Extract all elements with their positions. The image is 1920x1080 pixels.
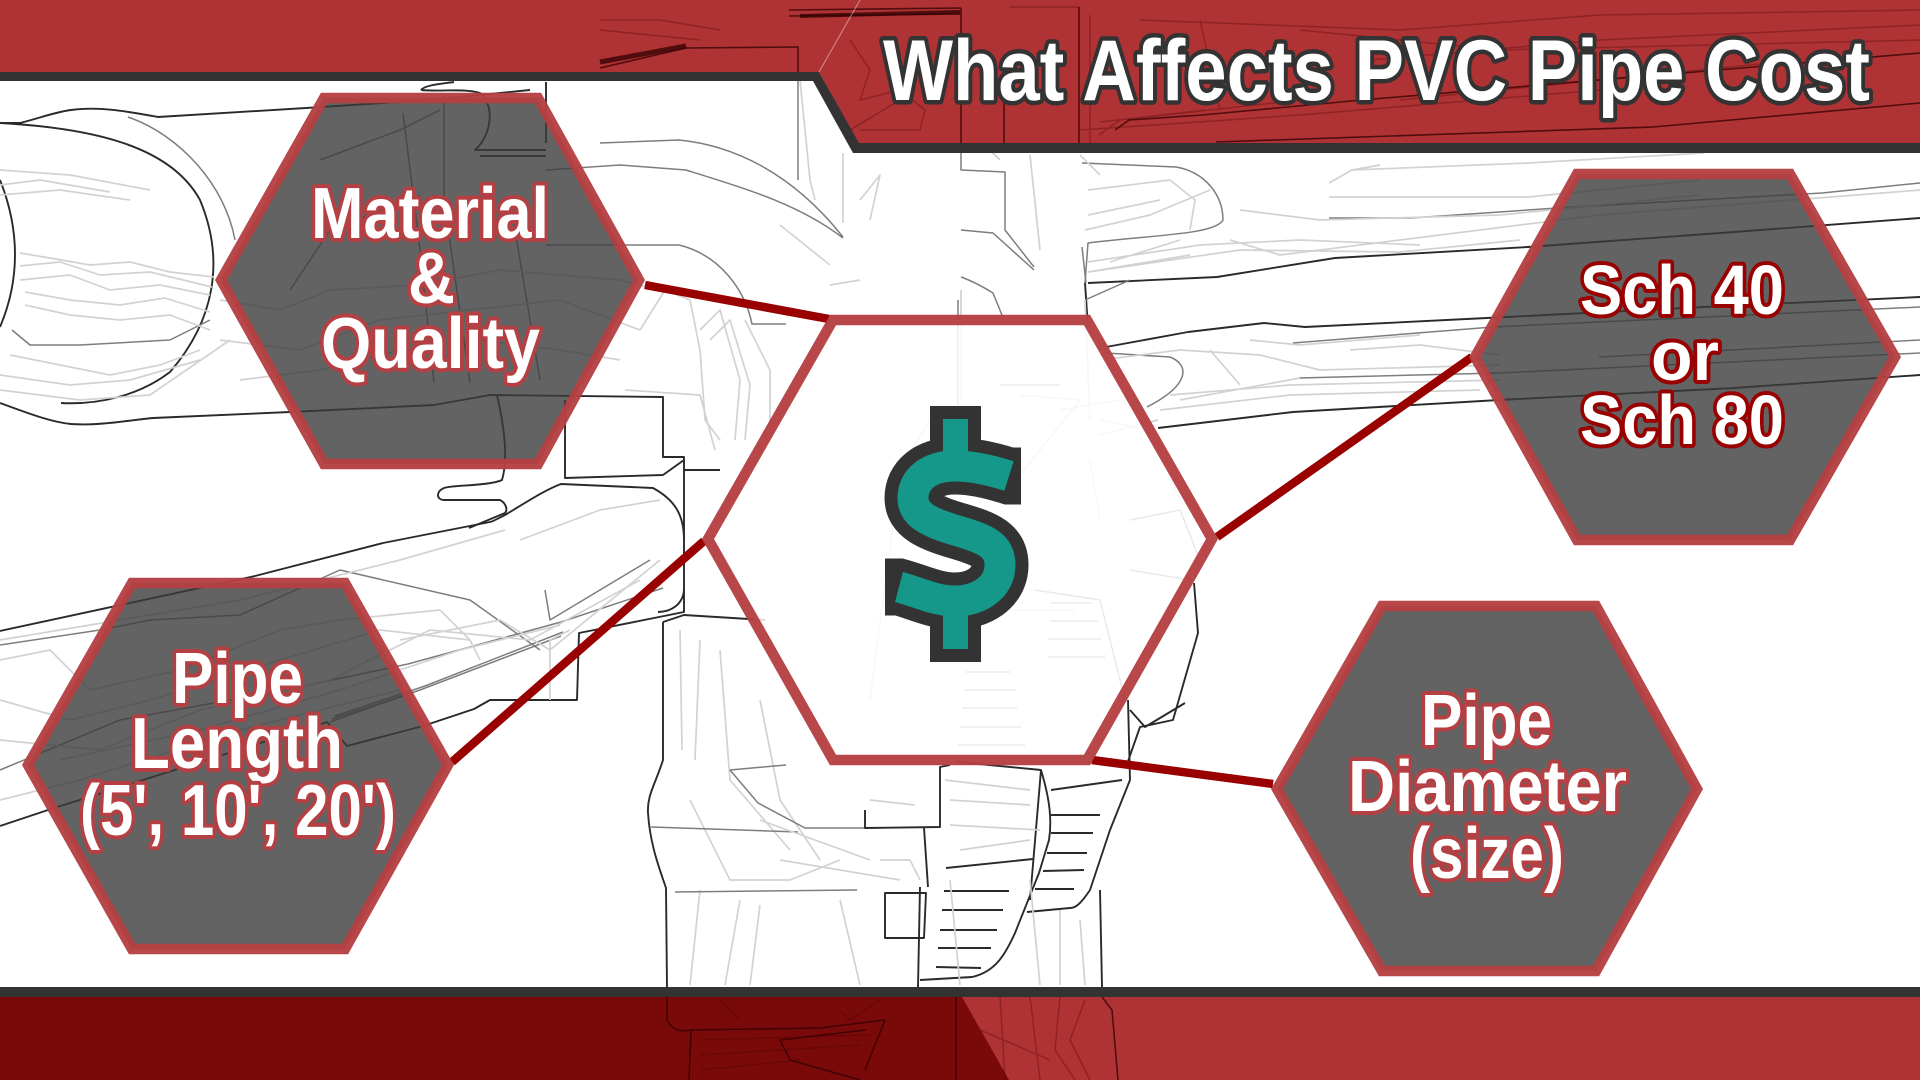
label: pipe diameter: (size) bbox=[1410, 814, 1564, 894]
icon: dollar sign bbox=[885, 406, 1021, 662]
label: pipe length bbox=[80, 639, 396, 851]
bottom band texture lines bbox=[667, 997, 1118, 1080]
bottom border bbox=[0, 987, 1920, 997]
label: pipe diameter: Pipe bbox=[1421, 681, 1552, 761]
banner texture lines bbox=[600, 0, 1920, 143]
label: pipe length: Length bbox=[131, 704, 343, 784]
top red banner bbox=[0, 0, 1920, 144]
label: pipe length: (5', 10', 20') bbox=[80, 771, 396, 851]
label: material and quality: Quality bbox=[321, 304, 540, 384]
banner border bbox=[0, 72, 1920, 153]
label: schedule 40 or 80 bbox=[1580, 251, 1784, 459]
label: pipe diameter bbox=[1348, 681, 1627, 894]
bottom red band bbox=[0, 997, 1920, 1080]
panel: pipe diameter bbox=[1277, 606, 1697, 971]
connector: pipe length to center bbox=[452, 541, 704, 762]
label: pipe length: Pipe bbox=[172, 639, 303, 719]
label: material and quality: Material bbox=[311, 174, 549, 254]
bottom dark red wedge bbox=[0, 997, 1009, 1080]
connector: material to center bbox=[645, 285, 829, 319]
label: schedule 40 or 80: or bbox=[1651, 317, 1719, 395]
panel: schedule bbox=[1475, 174, 1895, 540]
central hexagon with dollar icon bbox=[708, 320, 1212, 760]
label: material and quality bbox=[311, 174, 549, 384]
connector: schedule to center bbox=[1217, 357, 1472, 537]
panel: material and quality bbox=[221, 98, 639, 464]
label: pipe diameter: Diameter bbox=[1348, 747, 1627, 827]
connector: diameter to center bbox=[1092, 760, 1273, 784]
label: schedule 40 or 80: Sch 40 bbox=[1580, 251, 1784, 329]
label: material and quality: & bbox=[408, 239, 455, 319]
panel: pipe length bbox=[28, 583, 448, 949]
label: schedule 40 or 80: Sch 80 bbox=[1580, 381, 1784, 459]
